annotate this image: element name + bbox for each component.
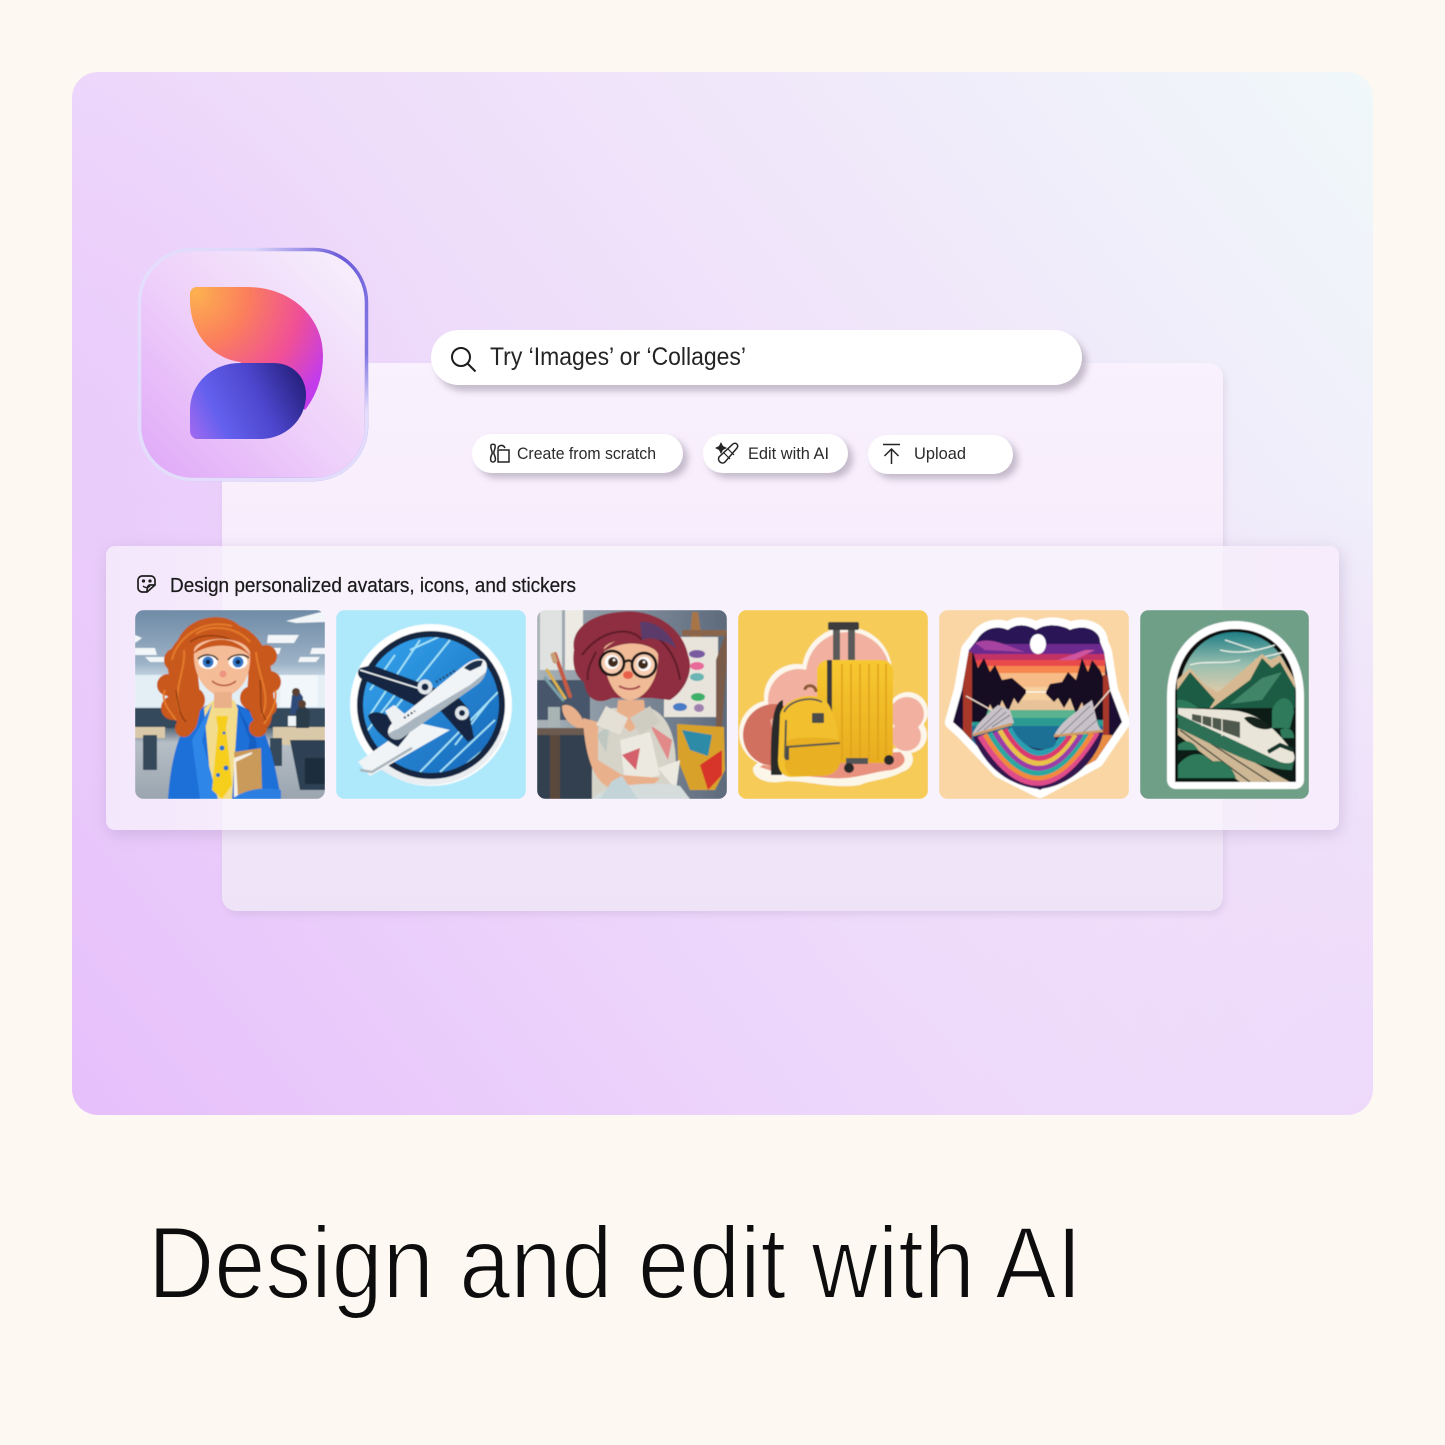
button: edit with AI: [703, 434, 853, 478]
icon: upload arrow: [883, 444, 900, 464]
search bar: Try ‘Images’ or ‘Collages’: [490, 343, 746, 371]
button: upload: [868, 435, 1018, 479]
button: create from scratch: [472, 434, 688, 478]
icon: sticker face: [138, 576, 155, 592]
image: hammock sunset sticker: [939, 610, 1130, 800]
icon: magnifier: [452, 348, 476, 372]
icon: magic wand: [715, 442, 738, 463]
image: airplane sticker: [336, 610, 526, 799]
icon: designer app logo: [140, 250, 366, 480]
icon: brush and shapes: [491, 444, 509, 462]
image: mountain train sticker: [1140, 610, 1309, 799]
image: luggage sticker: [738, 610, 928, 799]
image: red-haired avatar in office: [135, 610, 325, 799]
button: create from scratch: Create from scratch: [517, 444, 656, 463]
button: upload: Upload: [914, 444, 966, 463]
button: edit with AI: Edit with AI: [748, 444, 829, 463]
panel: app window: [222, 363, 1225, 915]
title: Design and edit with AI: [148, 1206, 1082, 1320]
gallery heading: Design personalized avatars, icons, and stickers: [170, 575, 576, 597]
panel: lilac gradient card: [72, 72, 1373, 1115]
panel: sticker gallery band: [106, 546, 1341, 834]
search bar: [431, 330, 1087, 391]
image: painter avatar: [537, 610, 727, 799]
